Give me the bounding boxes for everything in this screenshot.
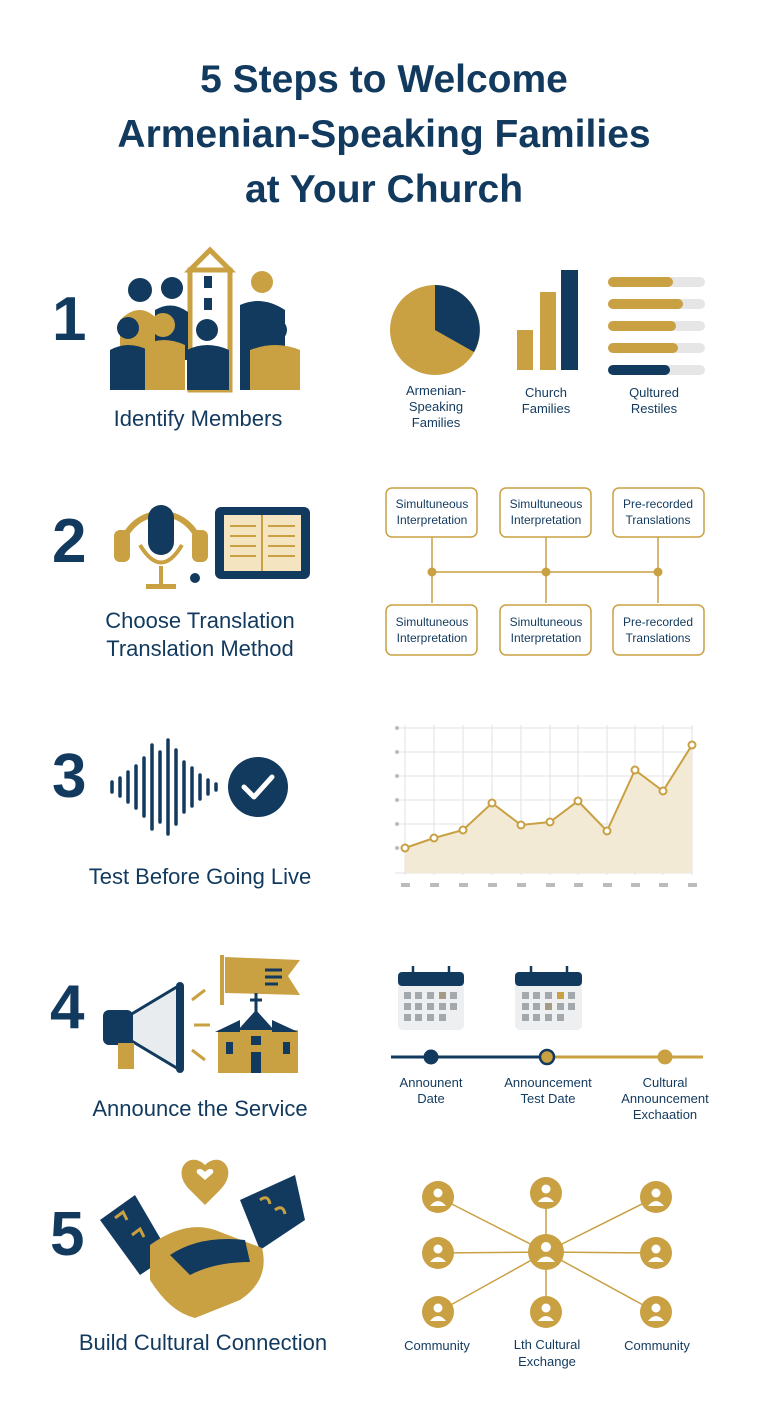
timeline xyxy=(391,1050,709,1122)
icon: people at church xyxy=(110,250,300,390)
calendars xyxy=(398,966,582,1030)
network diagram: Community xyxy=(404,1338,470,1353)
icon: church xyxy=(215,993,298,1073)
chart labels xyxy=(406,383,679,430)
icon: headset microphone xyxy=(114,505,208,589)
flowchart: Pre-recorded xyxy=(623,497,693,511)
title: at Your Church xyxy=(245,168,523,211)
chart: bars xyxy=(517,270,578,370)
icon: tablet bible xyxy=(215,507,310,579)
flowchart: Translations xyxy=(626,631,690,645)
chart labels: Restiles xyxy=(631,401,678,416)
step 2 number: 2 xyxy=(52,507,86,576)
flowchart: Translations xyxy=(626,513,690,527)
chart labels: Armenian- xyxy=(406,383,466,398)
timeline: Test Date xyxy=(521,1091,575,1106)
timeline: Announcement xyxy=(621,1091,709,1106)
step 4 number: 4 xyxy=(50,973,85,1042)
flowchart: Interpretation xyxy=(511,513,581,527)
title xyxy=(117,58,651,211)
step 5 number: 5 xyxy=(50,1200,84,1269)
icon: flag xyxy=(222,955,300,1005)
chart labels: Families xyxy=(522,401,571,416)
timeline: Date xyxy=(417,1091,445,1106)
icon: handshake with heart xyxy=(100,1160,305,1318)
icon: megaphone xyxy=(103,982,210,1073)
flowchart: Simultuneous xyxy=(510,497,582,511)
flowchart: Interpretation xyxy=(397,513,467,527)
network diagram xyxy=(404,1177,690,1369)
icon: sound wave xyxy=(112,740,216,834)
timeline: Cultural xyxy=(643,1075,688,1090)
label: choose translation xyxy=(105,608,295,661)
title: 5 Steps to Welcome xyxy=(200,58,568,101)
chart labels: Speaking xyxy=(409,399,463,414)
network diagram: Community xyxy=(624,1338,690,1353)
network diagram: Lth Cultural xyxy=(514,1337,580,1352)
flowchart: Interpretation xyxy=(511,631,581,645)
label: announce: Announce the Service xyxy=(92,1096,308,1121)
timeline: Announcement xyxy=(504,1075,592,1090)
title: Armenian-Speaking Families xyxy=(117,113,651,156)
flowchart: Simultuneous xyxy=(396,497,468,511)
timeline: Announent xyxy=(400,1075,463,1090)
flowchart: Pre-recorded xyxy=(623,615,693,629)
timeline: Exchaation xyxy=(633,1107,697,1122)
label: build connection: Build Cultural Connection xyxy=(79,1330,327,1355)
icon: check circle xyxy=(228,757,288,817)
line chart xyxy=(395,725,697,887)
flowchart xyxy=(386,488,704,655)
step 1 number: 1 xyxy=(52,285,86,354)
chart: horizontal bars xyxy=(608,277,705,375)
label: test: Test Before Going Live xyxy=(89,864,311,889)
chart labels: Qultured xyxy=(629,385,679,400)
flowchart: Simultuneous xyxy=(396,615,468,629)
step 3 number: 3 xyxy=(52,742,86,811)
label: choose translation: Translation Method xyxy=(106,636,294,661)
chart: pie xyxy=(390,285,480,375)
label: identify members: Identify Members xyxy=(114,406,282,431)
network diagram: Exchange xyxy=(518,1354,576,1369)
chart labels: Families xyxy=(412,415,461,430)
label: choose translation: Choose Translation xyxy=(105,608,295,633)
flowchart: Interpretation xyxy=(397,631,467,645)
flowchart: Simultuneous xyxy=(510,615,582,629)
chart labels: Church xyxy=(525,385,567,400)
